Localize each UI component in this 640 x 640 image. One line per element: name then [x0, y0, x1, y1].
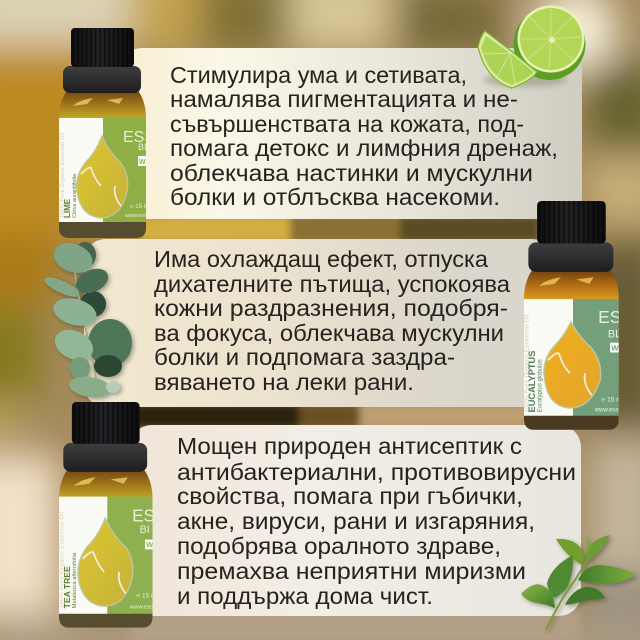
bottle label: ESS [598, 307, 633, 327]
bottle label [59, 118, 155, 222]
bottle label: ESS [132, 505, 167, 525]
bottle collar [63, 66, 141, 93]
panel: tea tree text [130, 425, 582, 616]
text: tea tree benefits: премахва неприятни миризми [177, 558, 526, 584]
text: lime benefits: болки и отблъсква насекоми. [170, 184, 500, 210]
bottle collar [63, 443, 147, 472]
text: lime benefits: Стимулира ума и сетивата, [170, 62, 467, 88]
text: tea tree benefits: подобрява оралното здраве, [177, 533, 501, 559]
text: tea tree benefits: Мощен природен антисептик с [177, 433, 522, 459]
bottle label: ℮ 15 m [136, 593, 156, 600]
bottle label: BI [140, 524, 150, 536]
text: eucalyptus benefits: ва фокуса, облекчава мускулни [154, 320, 504, 346]
text: eucalyptus benefits: дихателните пътища, успокоява [154, 271, 510, 297]
bottle label [524, 299, 619, 416]
bottle label: ESS [123, 129, 155, 146]
bottle label: Citrus aurantiifolia [72, 173, 78, 218]
bottle label: EUCALYPTUS [527, 351, 537, 412]
panel: lime text [120, 48, 582, 219]
icon: eucalyptus sprig [42, 238, 132, 400]
panel: eucalyptus text [84, 239, 554, 407]
bottle label: www.esse [129, 604, 157, 610]
bottle glass [524, 270, 619, 430]
bottle label [59, 496, 152, 614]
bottle label: Eucalyptus globulus [537, 359, 543, 412]
bottle label: www.esse [594, 407, 622, 413]
text: eucalyptus benefits: Има охлаждащ ефект, отпуска [154, 246, 488, 272]
text: lime benefits: помага детокс и лимфния дренаж, [170, 135, 558, 161]
icon: lime fruit [478, 6, 586, 88]
bottle label: Melaleuca alternifolia [72, 552, 78, 608]
text: eucalyptus benefits: болки и подпомага заздра- [154, 344, 455, 370]
bottle label: ℮ 15 m [601, 397, 622, 404]
bottle glass [59, 470, 152, 628]
bottle label: 100% Pure Organic Essential Oil [60, 133, 66, 218]
bottle: lime [59, 28, 155, 238]
bottle: eucalyptus [524, 201, 619, 430]
bottle: tea tree [59, 402, 152, 628]
bottle label: W [146, 540, 154, 549]
text: lime benefits: съвършенствата на кожата, под- [170, 111, 524, 137]
bottle cap [71, 28, 134, 67]
text: tea tree benefits: свойства, помага при гъбички, [177, 483, 523, 509]
bottle label: W [611, 343, 619, 352]
icon: lime wedge [478, 31, 537, 88]
bottle glass [59, 92, 146, 238]
text: tea tree benefits: антибактериални, противовирусни [177, 459, 576, 485]
text: lime benefits: облекчава настинки и мускулни [170, 160, 533, 186]
bottle label: WO [139, 159, 152, 166]
bottle label: ℮ 15 m [130, 204, 149, 210]
bottle cap [537, 201, 606, 244]
bottle cap [72, 402, 140, 444]
text: eucalyptus benefits: вяването на леки рани. [154, 369, 414, 395]
icon: tea sprig [521, 535, 636, 630]
bottle collar [528, 242, 613, 272]
text: eucalyptus benefits: кожни раздразнения, подобря- [154, 295, 508, 321]
text: tea tree benefits: акне, вируси, рани и изгаряния, [177, 508, 535, 534]
bottle label: BL [608, 328, 621, 340]
bottle label: TEA TREE [62, 566, 72, 608]
bottle label: LIME [63, 198, 72, 218]
text: lime benefits: намалява пигментацията и не- [170, 86, 518, 112]
bottle label: 100% Pure Organic Essential Oil [59, 512, 65, 608]
bottle label: www.ess [124, 213, 147, 219]
bottle label: BI [138, 142, 147, 152]
text: tea tree benefits: и поддържа дома чист. [177, 583, 433, 609]
bottle label: 100% Pure Organic Essential Oil [524, 314, 530, 412]
